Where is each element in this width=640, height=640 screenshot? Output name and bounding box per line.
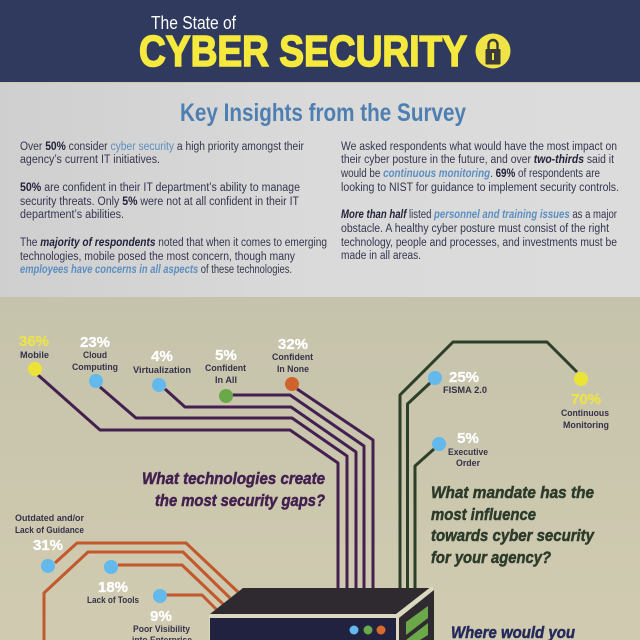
tan background [0,296,640,640]
paragraph: emerging technologies: technologies, mobile posed the most concern, though many [20,251,295,263]
paragraph: personnel and training: obstacle. A healthy cyber posture must consist of the right [341,223,610,235]
question: mandate [431,483,595,567]
item: continuous monitoring: Monitoring [563,420,609,431]
item: confident in all: In All [215,375,237,386]
item: outdated guidance: 31% [33,537,63,554]
paragraph: emerging technologies [20,237,327,276]
item: virtualization: 4% [151,348,173,365]
item: lack of tools: Lack of Tools [87,595,139,606]
question: mandate: for your agency? [431,548,552,567]
item: confident in none: In None [277,364,309,375]
paragraph: personnel and training: technology, people and processes, and investments must be [341,237,617,249]
item: confident in none [272,336,314,391]
paragraph: priority [20,141,304,166]
item: poor visibility [132,589,192,640]
icon: padlock [476,34,510,68]
panel: key insights [0,83,640,297]
header subtitle: The State of [151,13,237,33]
item: virtualization: Virtualization [133,365,191,376]
purple circuit lines [38,375,373,590]
item: cloud computing: Computing [72,362,118,373]
orange circuit lines [44,543,238,640]
item: continuous monitoring: Continuous [561,408,609,419]
paragraph: personnel and training: More than half listed personnel and training issues as a major [341,209,617,221]
green circuit lines [400,342,577,590]
item: confident in none: Confident [272,352,314,363]
paragraph: confidence: security threats. Only 5% were not at all confident in their IT [20,196,299,208]
item: virtualization [133,348,191,392]
paragraph: emerging technologies: employees have concerns in all aspects of these technologies. [20,264,292,276]
item: cloud computing: 23% [80,334,110,351]
header title: CYBER SECURITY [139,27,467,76]
item: cloud computing [72,334,118,388]
paragraph: continuous monitoring [340,141,619,194]
item: poor visibility: Poor Visibility [133,624,191,635]
item: fisma: 25% [449,369,479,386]
item: confident in all: 5% [215,347,237,364]
item: outdated guidance: Outdated and/or [15,513,84,524]
paragraph: continuous monitoring: looking to NIST for guidance to implement security controls. [341,182,619,194]
panel: header [0,0,640,82]
item: confident in all [205,347,247,403]
item: continuous monitoring [561,372,609,431]
paragraph: confidence [20,182,300,221]
paragraph: continuous monitoring: would be continuous monitoring. 69% of respondents are [340,168,600,180]
paragraph: confidence: department’s abilities. [20,209,124,221]
paragraph: priority: Over 50% consider cyber security a high priority amongst their [20,141,304,153]
item: executive order: Executive [448,447,488,458]
item: confident in all: Confident [205,363,247,374]
item: confident in none: 32% [278,336,308,353]
item: executive order: Order [456,458,480,469]
paragraph: continuous monitoring: We asked respondents what would have the most impact on [341,141,617,153]
paragraph: personnel and training [341,209,617,262]
paragraph: continuous monitoring: their cyber posture in the future, and over two-thirds said it [341,154,615,166]
item: cloud computing: Cloud [83,350,107,361]
paragraph: emerging technologies: The majority of respondents noted that when it comes to emerging [20,237,327,249]
item: executive order [432,430,488,469]
paragraph: confidence: 50% are confident in their IT department’s ability to manage [20,182,300,194]
item: mobile: Mobile [20,350,49,361]
item: fisma [428,369,487,396]
item: outdated guidance [15,513,84,573]
item: poor visibility: 9% [150,608,172,625]
item: fisma: FISMA 2.0 [443,385,487,396]
item: lack of tools [87,560,139,606]
item: outdated guidance: Lack of Guidance [15,525,84,536]
item: mobile: 36% [19,333,49,350]
question: mandate: most influence [431,505,536,524]
section heading: Key Insights from the Survey [180,99,466,127]
question: technologies: the most security gaps? [155,491,326,510]
paragraph: personnel and training: made in all areas. [341,250,421,262]
icon: router [209,586,434,640]
item: continuous monitoring: 70% [571,391,601,408]
item: executive order: 5% [457,430,479,447]
paragraph: priority: agency’s current IT initiatives. [20,154,160,166]
question: mandate: What mandate has the [431,483,594,502]
question: mandate: towards cyber security [431,526,595,545]
question: technologies [142,469,326,510]
question: technologies: What technologies create [142,469,325,488]
item: mobile [19,333,49,376]
item: lack of tools: 18% [98,579,128,596]
